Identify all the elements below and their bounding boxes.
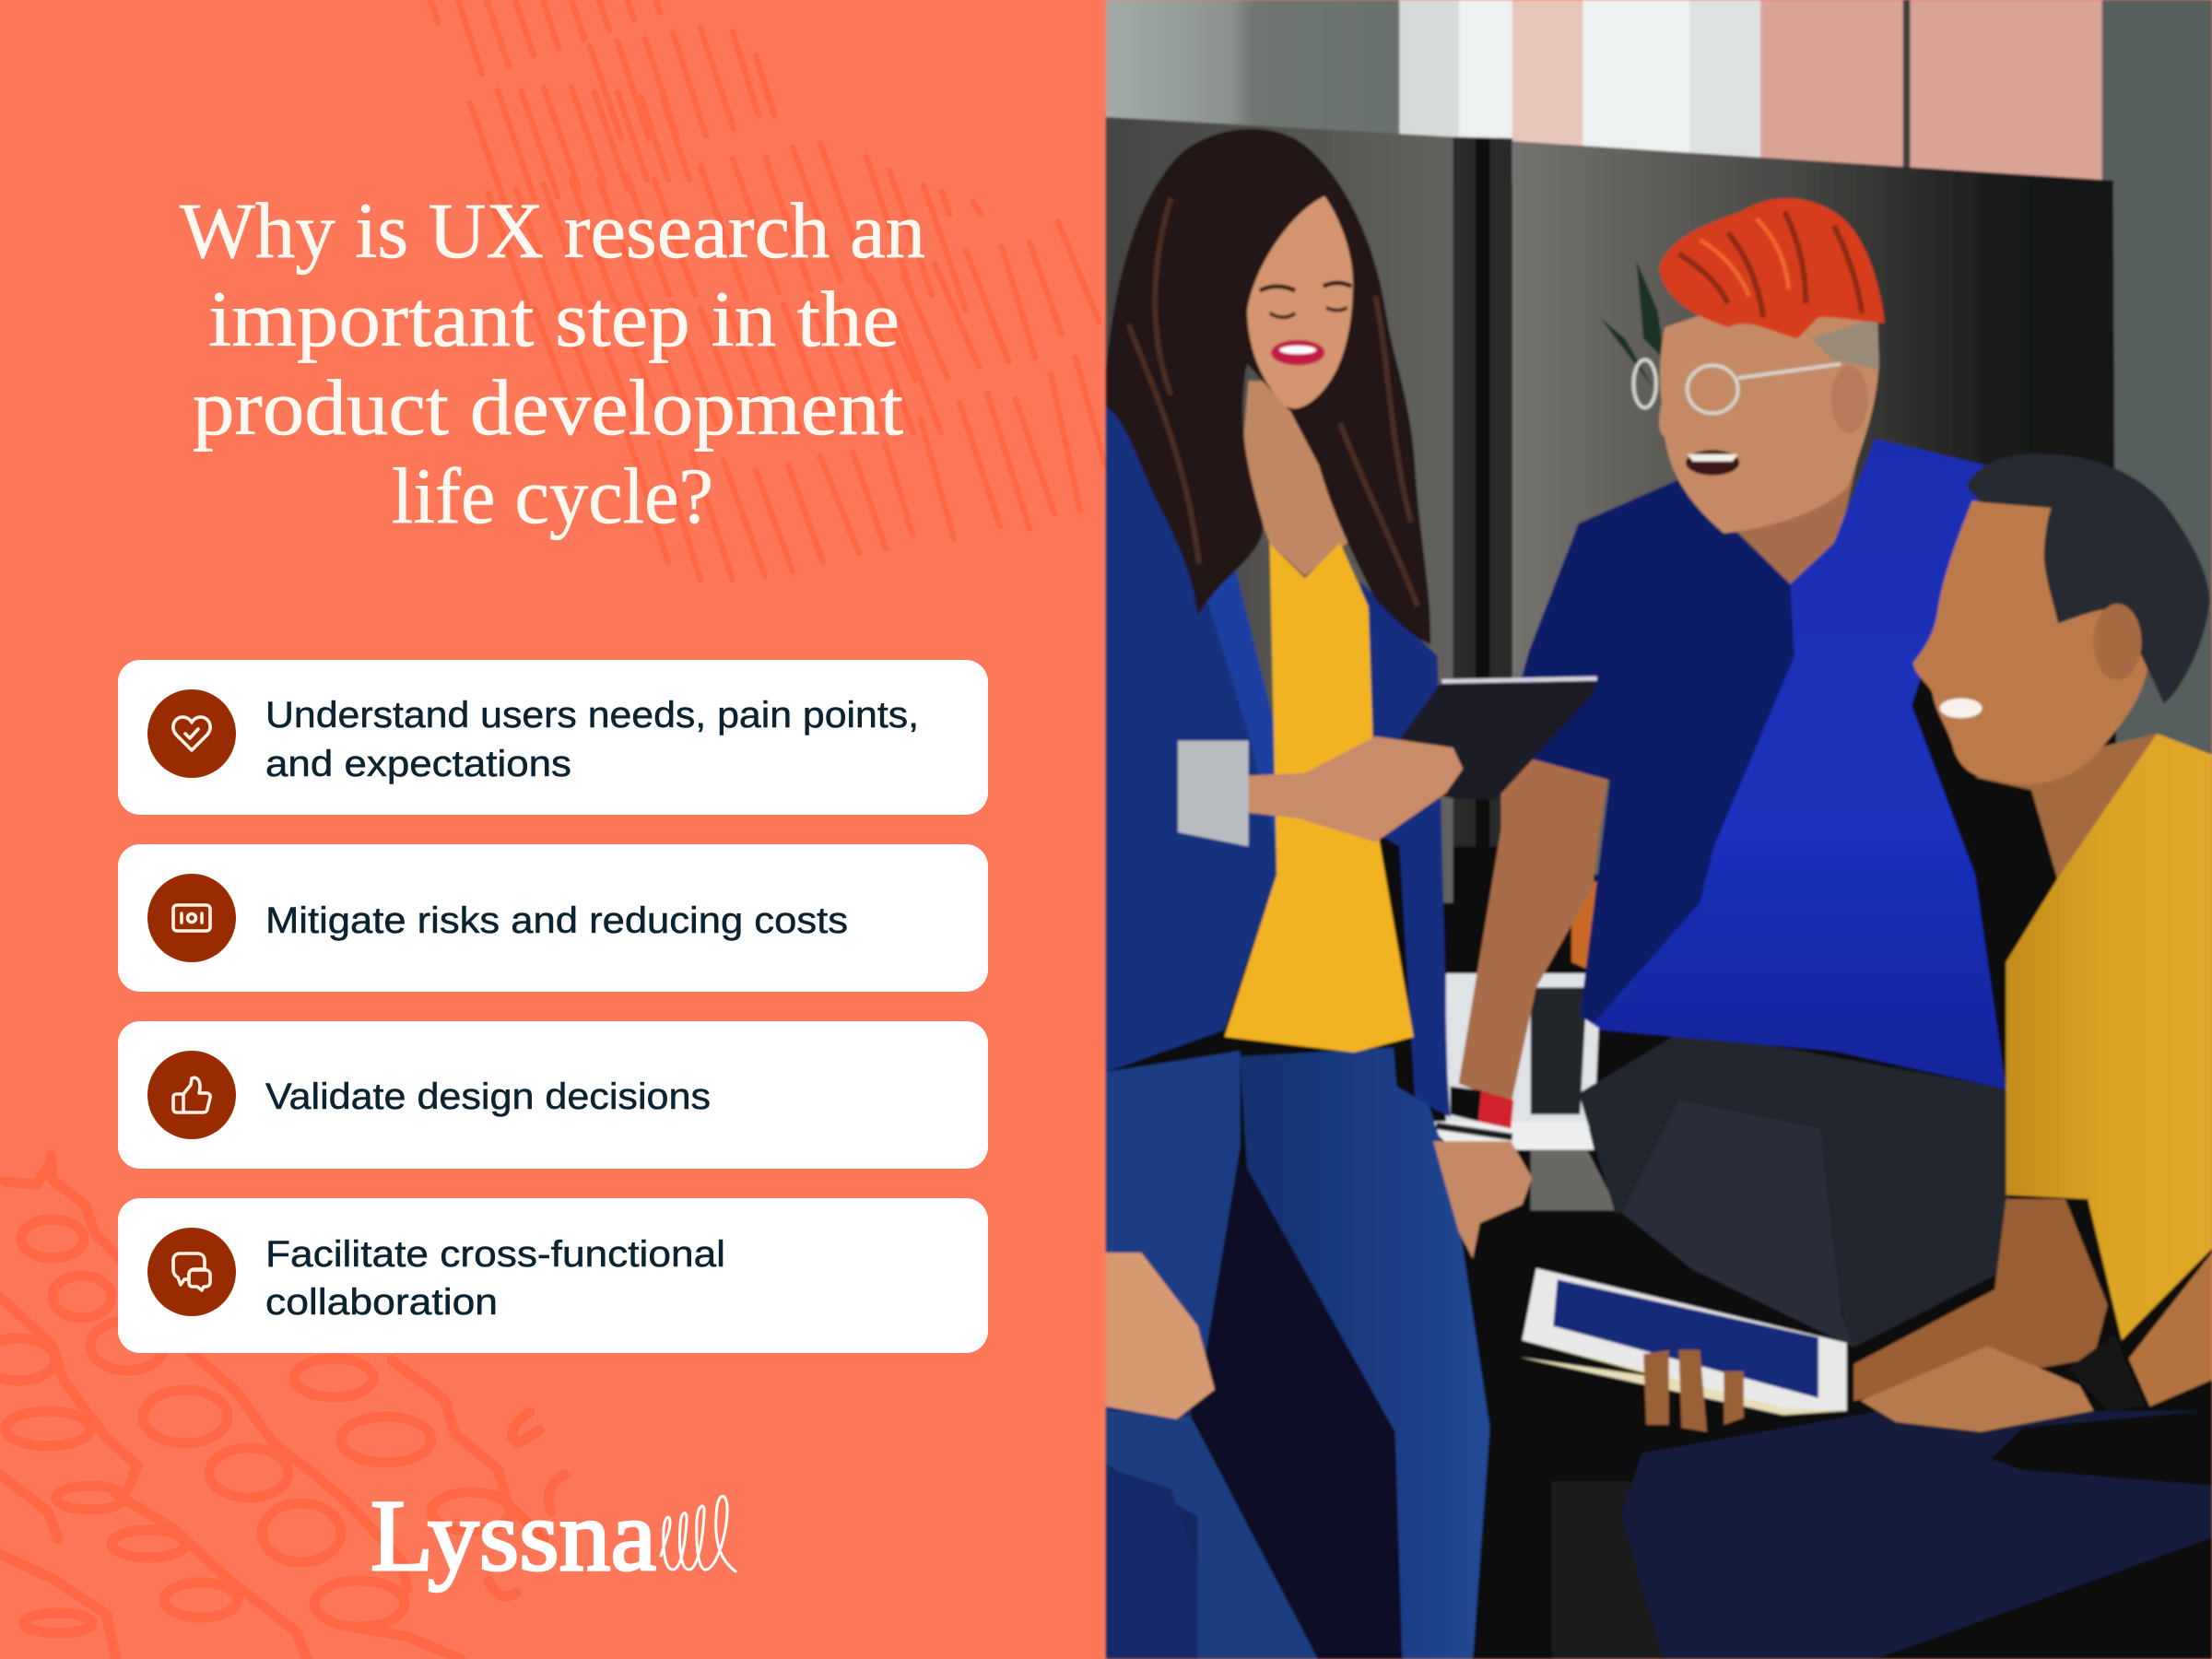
man: laughing mouth xyxy=(1686,450,1739,476)
seated man: hand xyxy=(1861,1346,2093,1432)
photo background: dark partition xyxy=(1106,117,2116,1016)
seated man in mustard shirt xyxy=(1519,453,2212,1659)
seated man: ear xyxy=(2093,604,2141,680)
woman: face xyxy=(1247,196,1353,408)
man with red hair xyxy=(1433,198,2009,1347)
card: mitigate risks xyxy=(118,844,988,992)
decorative coil pattern xyxy=(0,1156,564,1659)
text: facilitate collaboration: collaboration xyxy=(265,1282,498,1323)
card: facilitate collaboration xyxy=(118,1198,988,1353)
seated man: smile xyxy=(1940,699,1983,718)
icon: chat bubbles xyxy=(147,1228,236,1316)
seated man: dark trousers xyxy=(1621,1411,2212,1659)
man: ear xyxy=(1831,365,1868,433)
text: facilitate collaboration: Facilitate cross-functional xyxy=(265,1234,725,1275)
text: understand users: Understand users needs, pain points, xyxy=(265,695,919,735)
woman: navy blazer xyxy=(1106,395,1450,1117)
woman: blue jeans xyxy=(1106,1047,1489,1659)
man: forearm and watch xyxy=(1433,747,1608,1258)
man: trousers xyxy=(1579,1030,2009,1347)
icon: banknote xyxy=(147,874,236,962)
icon: thumbs up xyxy=(147,1051,236,1139)
title: product development xyxy=(193,363,903,452)
man: neck xyxy=(1728,452,1859,584)
seated man: chair xyxy=(1877,1411,2212,1659)
woman: yellow blouse xyxy=(1225,543,1414,1053)
logo: Lyssna: Lyssna xyxy=(371,1479,656,1592)
seated man: arms xyxy=(1853,1199,2212,1406)
seated man: face xyxy=(1913,500,2151,784)
seated man: wristwatch xyxy=(2068,1335,2146,1411)
panel: left coral background xyxy=(0,0,1106,1659)
man: clear glasses xyxy=(1633,359,1841,413)
title: life cycle? xyxy=(392,452,713,540)
icon: heart with check xyxy=(147,689,236,778)
woman with dark hair xyxy=(1106,129,1489,1659)
text: facilitate collaboration xyxy=(265,1234,725,1323)
text: understand users xyxy=(265,695,919,784)
card: validate design xyxy=(118,1021,988,1169)
seated man: tablet and notebook xyxy=(1519,1268,1847,1415)
woman: clasped hands at lower left xyxy=(1106,1253,1215,1419)
seated man: mustard t-shirt xyxy=(2006,734,2212,1340)
man: shaved side of head xyxy=(1811,317,1879,370)
man: face xyxy=(1659,303,1879,534)
seated man: fingers xyxy=(1643,1350,1744,1432)
man: blue shirt xyxy=(1501,439,2006,1089)
woman: arm, hand and cuff xyxy=(1178,736,1463,846)
text: understand users: and expectations xyxy=(265,744,571,784)
man: red hair xyxy=(1659,198,1885,338)
decorative hatch pattern xyxy=(430,0,1105,581)
photo: three colleagues laughing around a tablet xyxy=(1106,0,2212,1659)
woman: chest xyxy=(1241,381,1347,575)
seated man: dark hair xyxy=(1967,453,2209,704)
photo background: wall and window xyxy=(1106,0,2212,1659)
woman: eyes and smile xyxy=(1260,283,1351,365)
title: Why is UX research an xyxy=(180,186,925,275)
seated man: neck xyxy=(1975,734,2157,882)
text: validate design: Validate design decisions xyxy=(265,1077,711,1117)
text: mitigate risks: Mitigate risks and reducing costs xyxy=(265,900,848,941)
tablet held by woman xyxy=(1370,678,1597,800)
title: important step in the xyxy=(208,275,900,363)
woman: long dark hair xyxy=(1106,129,1430,644)
photo background: table, plant and pot xyxy=(1425,261,1665,1659)
title xyxy=(180,186,925,540)
card: understand users xyxy=(118,660,988,815)
